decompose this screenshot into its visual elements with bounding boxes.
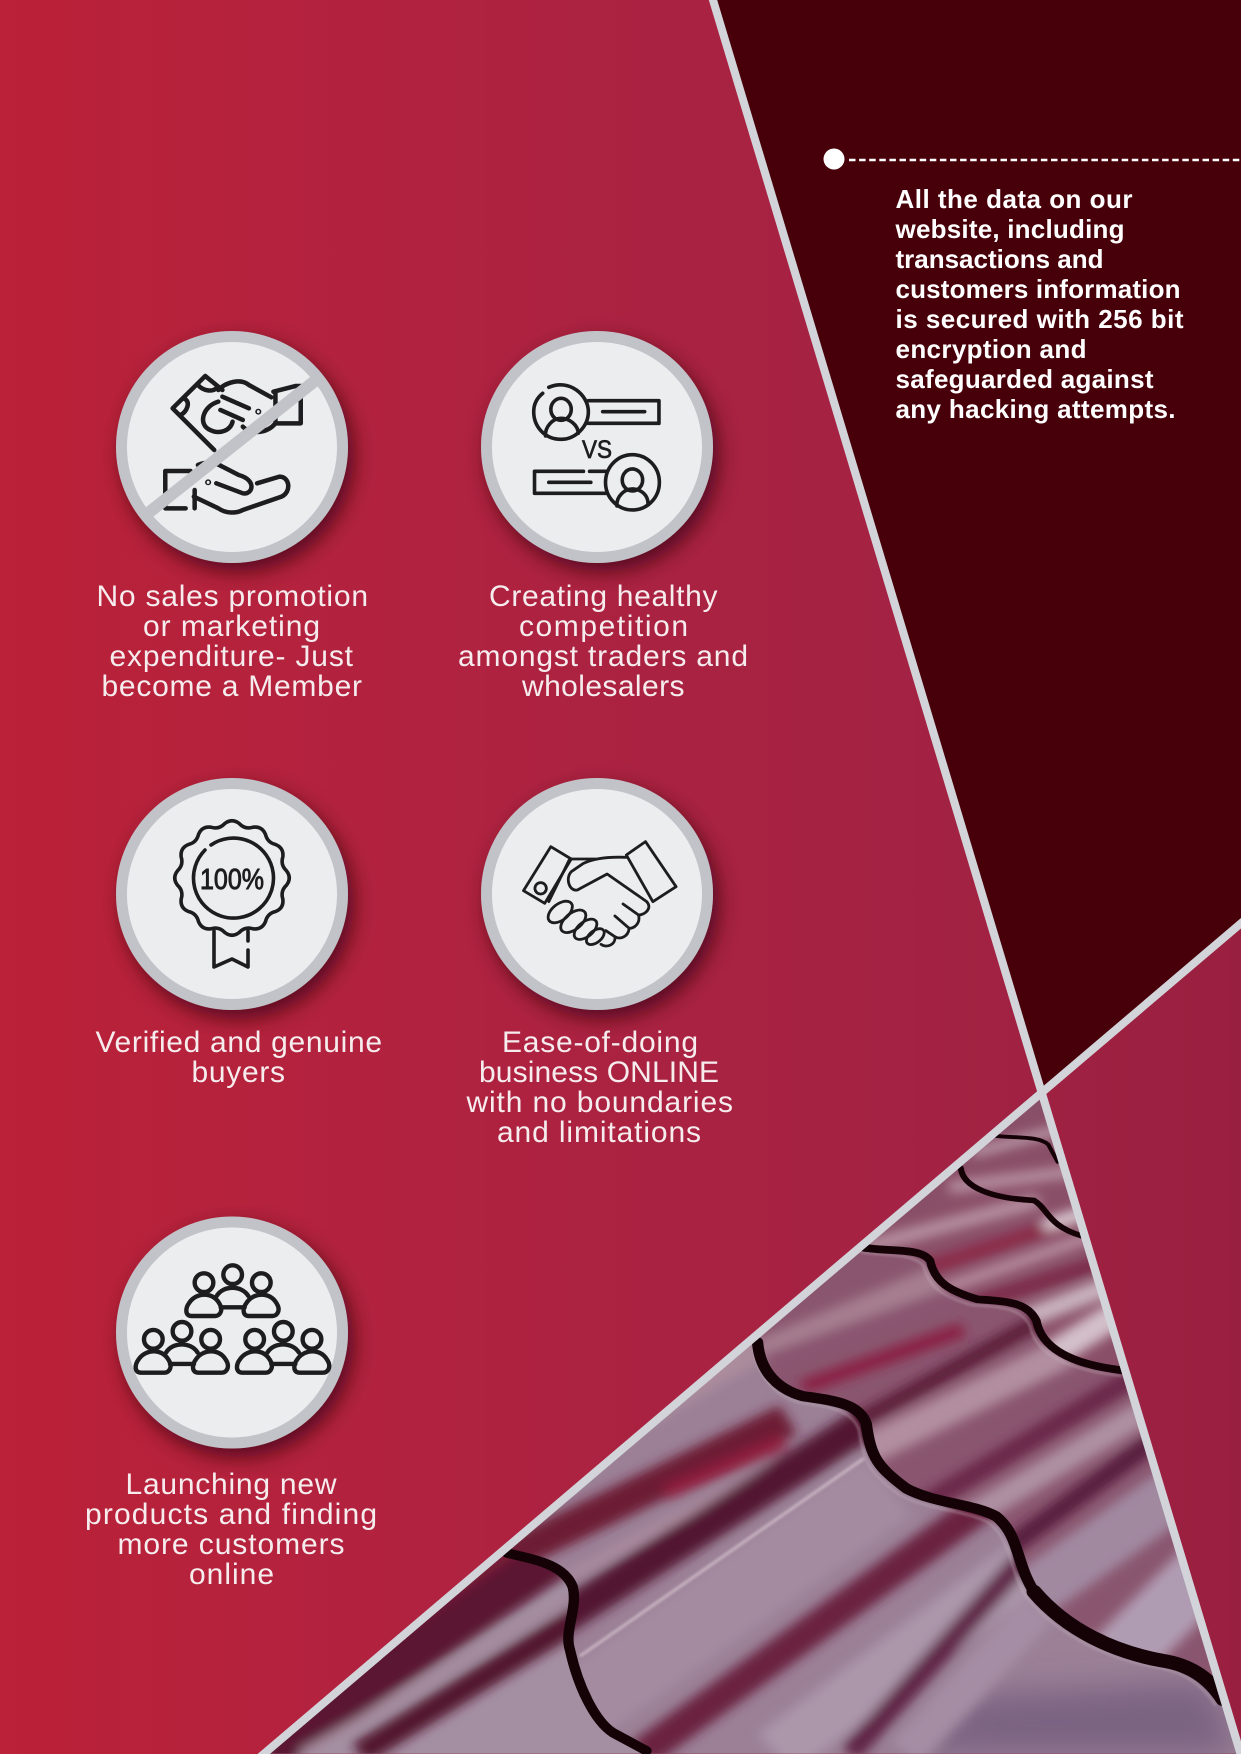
text block: security statement (894, 184, 1184, 424)
caption: more customers (118, 1528, 344, 1561)
caption: business ONLINE (479, 1056, 719, 1089)
caption: Ease-of-doing (502, 1026, 698, 1059)
caption: Creating healthy (489, 580, 718, 613)
divider lines (258, 0, 1241, 1754)
caption (96, 1026, 382, 1089)
text block: security statement: any hacking attempts. (896, 394, 1176, 424)
caption (466, 1026, 733, 1149)
benefit: ease of doing business (466, 784, 733, 1149)
icon badge: no money exchange (122, 336, 342, 558)
icon badge: handshake (486, 784, 708, 1004)
benefit: new products and customers (85, 1222, 377, 1591)
tile edge highlights (754, 1252, 1216, 1706)
caption (85, 1468, 377, 1591)
text block: security statement: safeguarded against (896, 364, 1154, 394)
caption: buyers (192, 1056, 285, 1089)
panel: dark security panel (713, 0, 1241, 1092)
caption (96, 580, 368, 703)
caption: with no boundaries (466, 1086, 733, 1119)
tile wave shadows (507, 1136, 1223, 1751)
caption: wholesalers (521, 670, 684, 703)
caption: Verified and genuine (96, 1026, 382, 1059)
caption: No sales promotion (96, 580, 368, 613)
benefit: healthy competition (458, 336, 748, 703)
text block: security statement: transactions and (896, 244, 1104, 274)
text block: security statement: All the data on our (896, 184, 1132, 214)
text block: security statement: encryption and (896, 334, 1086, 364)
caption (458, 580, 748, 703)
text block: security statement: customers information (896, 274, 1180, 304)
panel: right triangle (1041, 923, 1241, 1754)
icon badge: customer groups (122, 1222, 342, 1443)
caption: become a Member (102, 670, 362, 703)
icon badge: versus: VS (582, 436, 612, 464)
caption: Launching new (126, 1468, 337, 1501)
caption: competition (519, 610, 688, 643)
text block: security statement: is secured with 256 bit (896, 304, 1184, 334)
icon badge: versus (486, 336, 708, 558)
caption: amongst traders and (458, 640, 748, 673)
benefit: verified buyers (96, 784, 382, 1089)
icon badge: 100% rosette (122, 784, 342, 1004)
photo: metal roof tiles (264, 1080, 1237, 1754)
caption: online (189, 1558, 274, 1591)
caption: products and finding (85, 1498, 377, 1531)
caption: expenditure- Just (110, 640, 354, 673)
caption: or marketing (143, 610, 320, 643)
icon badge: 100% rosette: 100% (200, 864, 264, 896)
text block: security statement: website, including (894, 214, 1124, 244)
callout: dot and dashed leader (824, 148, 1241, 170)
benefit: no sales promotion (96, 336, 368, 703)
caption: and limitations (497, 1116, 701, 1149)
